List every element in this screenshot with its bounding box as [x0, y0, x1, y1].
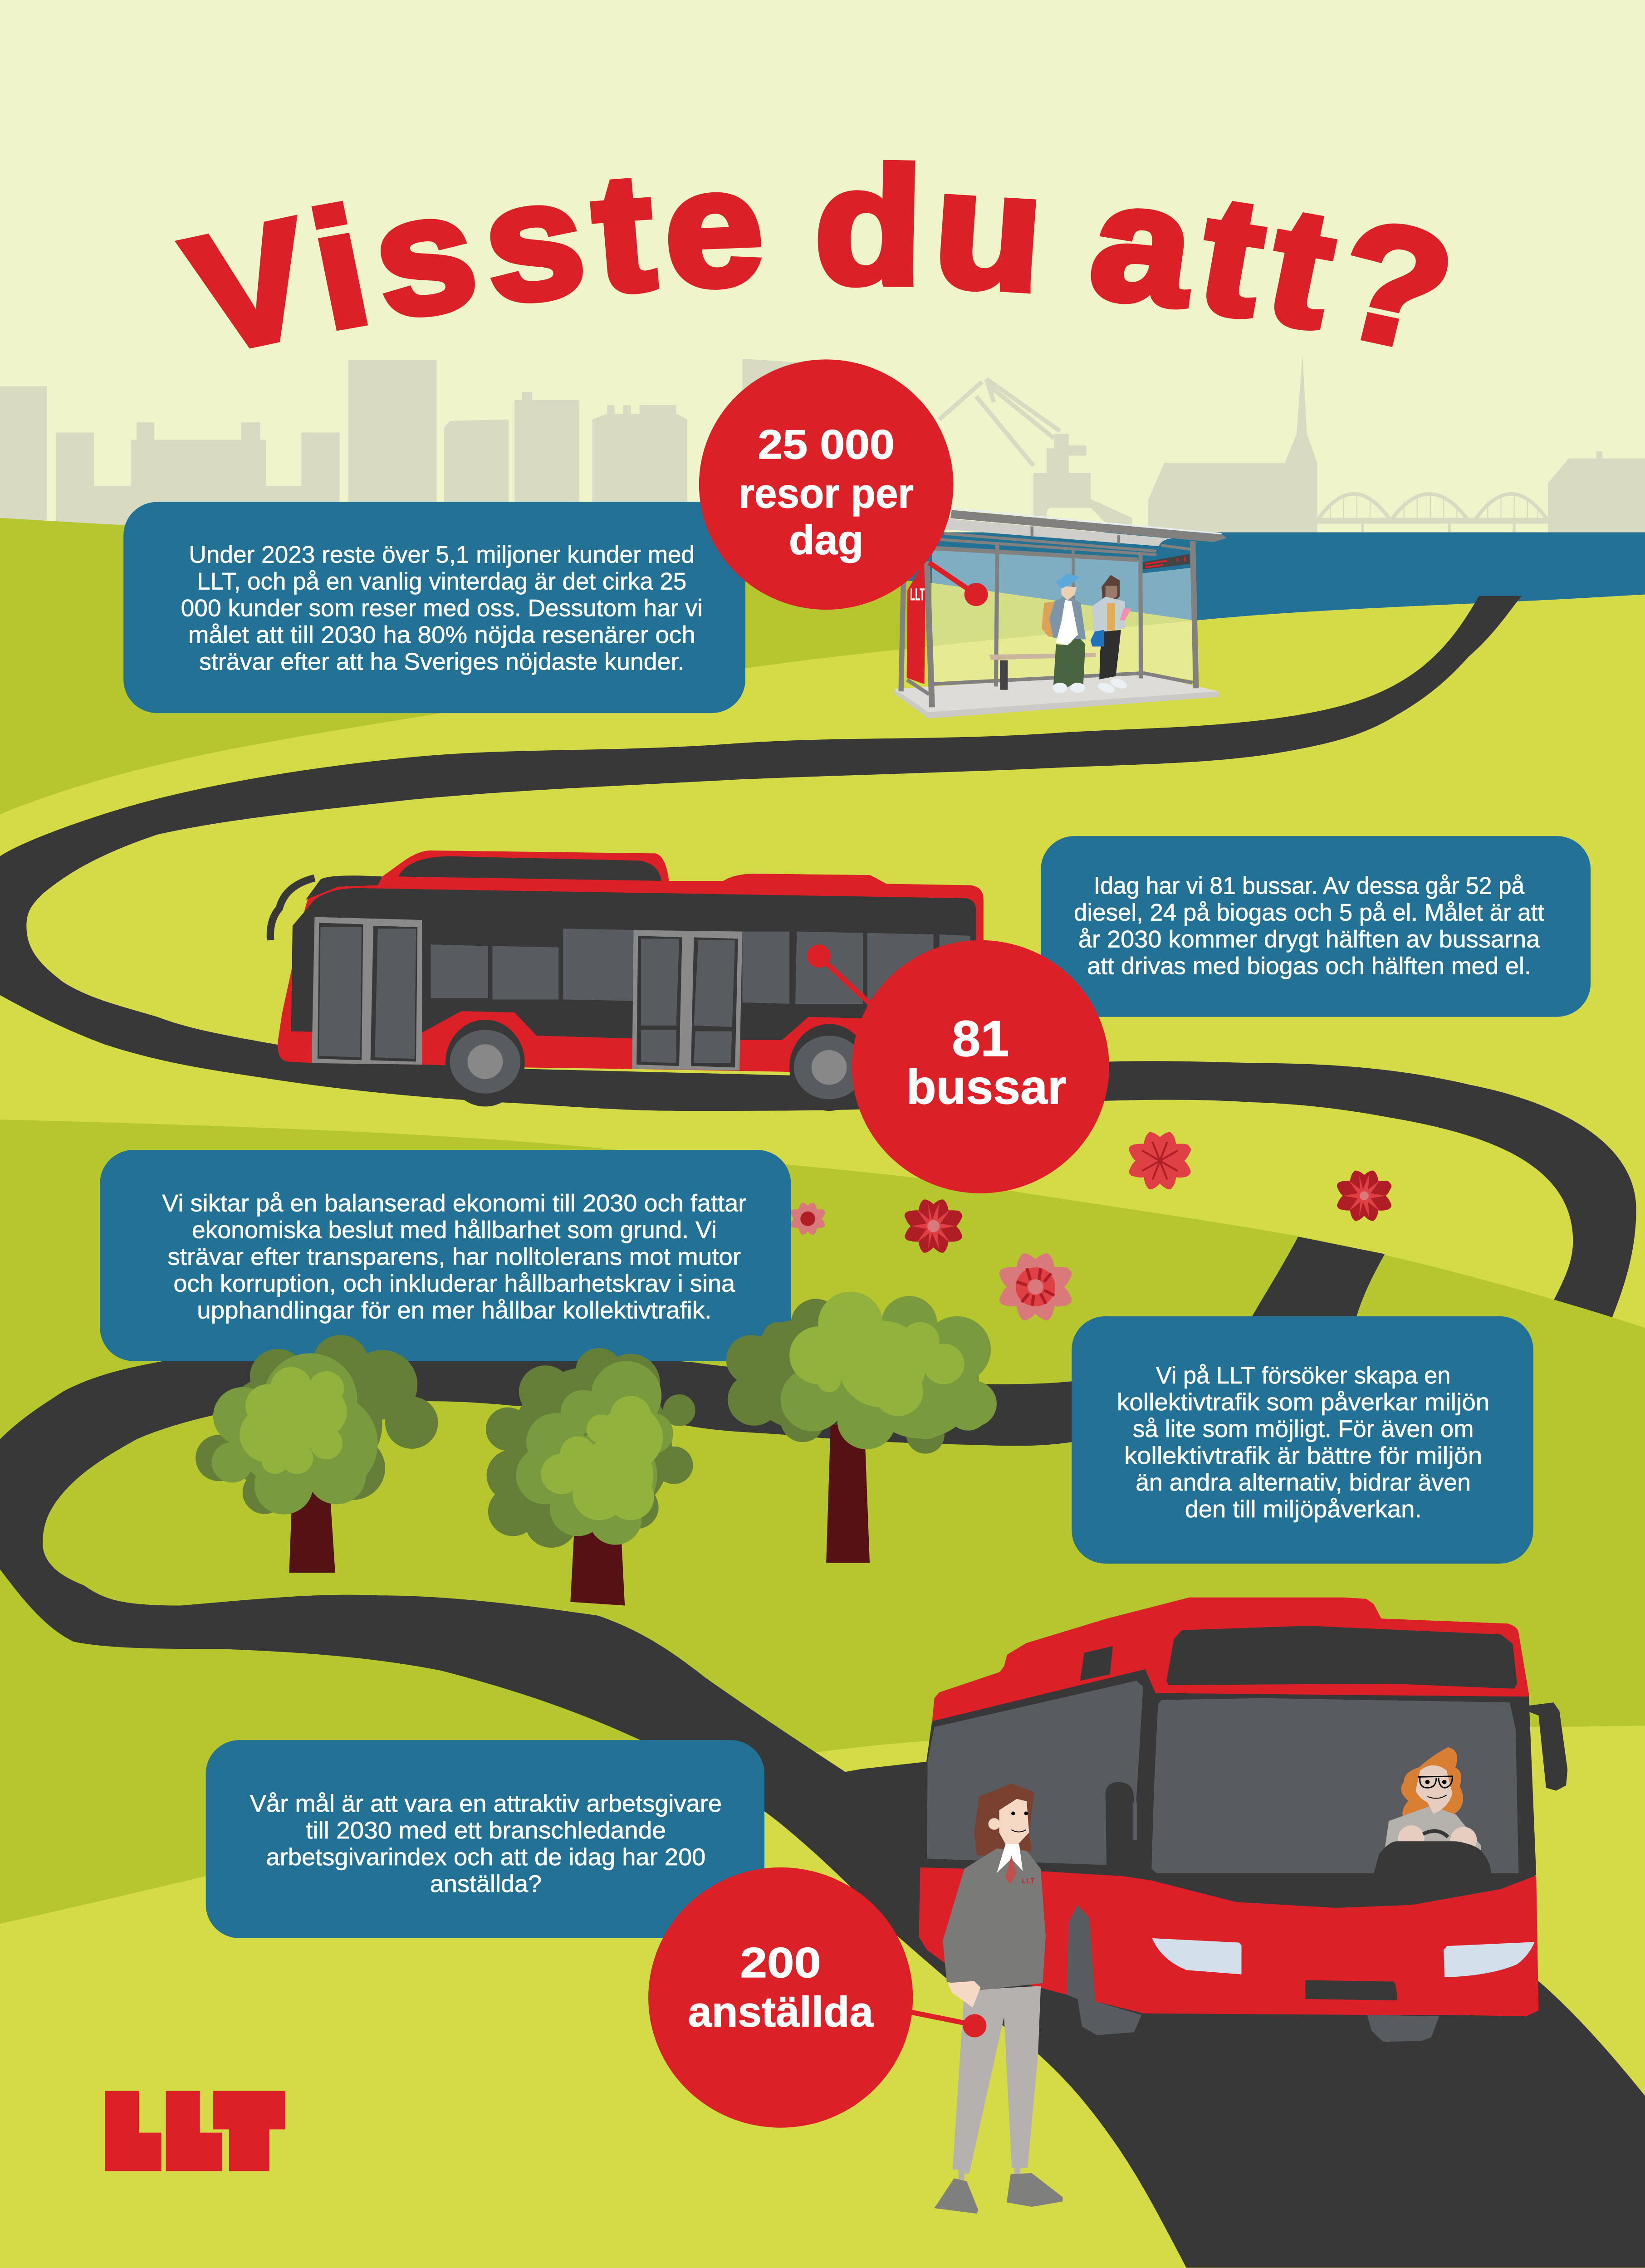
employee in uniform	[935, 1784, 1062, 2214]
dark body	[920, 1669, 1536, 1912]
info box: travellers: LLT, och på en vanlig vinterdag är det cirka 25	[197, 568, 686, 595]
flower 5	[999, 1253, 1072, 1320]
harbour crane	[940, 379, 1132, 538]
title: Visste du att?	[171, 132, 1479, 388]
info box: fleet: Idag har vi 81 bussar. Av dessa går 52 på	[1094, 873, 1525, 899]
flowers	[790, 1132, 1391, 1320]
bus driver	[1385, 1747, 1481, 1859]
mirror	[270, 878, 314, 940]
advertising panel	[907, 560, 925, 684]
info box: fleet	[1041, 836, 1591, 1017]
callout circle: 81 bussar: bussar	[906, 1060, 1067, 1114]
callout: 81 bussar pointer	[807, 944, 870, 1004]
bench	[989, 653, 1096, 690]
info box: economy: strävar efter transparens, har nolltolerans mot mutor	[167, 1244, 741, 1270]
info box: employer: till 2030 med ett branschledande	[306, 1817, 666, 1844]
collar and tie	[997, 1844, 1023, 1873]
glass back wall	[931, 550, 1142, 685]
number plate	[1305, 1980, 1397, 2000]
hand	[948, 1981, 980, 2008]
light green hill middle	[0, 595, 1645, 1447]
info box: travellers: strävar efter att ha Sveriges nöjdaste kunder.	[199, 649, 684, 675]
passenger: man with cap	[1042, 574, 1086, 693]
flower 4	[790, 1202, 825, 1235]
passenger: woman with phone	[1091, 575, 1131, 695]
bus shelter with two passengers: LLT	[910, 585, 925, 604]
middle door	[632, 930, 742, 1070]
rear wheel arch and wheel	[446, 1020, 525, 1106]
wheels	[1067, 1905, 1141, 2035]
LLT logo: L	[114, 2091, 151, 2172]
callout: 25 000 pointer	[929, 562, 988, 606]
side windows	[431, 929, 970, 1020]
info box: environment: än andra alternativ, bidrar även	[1136, 1469, 1471, 1496]
LLT logo: L	[175, 2091, 211, 2172]
callout circle: 25 000 resor per dag	[699, 359, 953, 610]
callout circle: 200 anställda: 200	[740, 1939, 821, 1987]
info box: economy	[100, 1150, 791, 1361]
front wheel arch and wheel	[789, 1024, 869, 1111]
roof	[950, 510, 1226, 542]
info box: environment: kollektivtrafik är bättre för miljön	[1124, 1442, 1482, 1469]
info box: economy: upphandlingar för en mer hållbar kollektivtrafik.	[197, 1297, 711, 1324]
info box: employer: arbetsgivarindex och att de idag har 200	[266, 1844, 705, 1871]
callout circle: 81 bussar	[852, 940, 1109, 1193]
road: lower winding section	[0, 1237, 1645, 2268]
callout circle: 200 anställda: anställda	[688, 1988, 874, 2036]
left headlight	[1152, 1938, 1242, 1975]
lower red body	[919, 1867, 1538, 2016]
info box: employer: anställda?	[430, 1871, 542, 1897]
LLT logo: T	[227, 2091, 271, 2171]
windshield	[1151, 1698, 1518, 1873]
callout circle: 25 000 resor per dag: dag	[789, 517, 863, 563]
info box: employer	[206, 1740, 764, 1938]
river	[823, 532, 1645, 621]
info box: travellers	[123, 502, 745, 713]
shoes	[935, 2178, 978, 2214]
light green hill bottom	[0, 1725, 1645, 2268]
info box: environment: den till miljöpåverkan.	[1185, 1496, 1421, 1523]
tree 1	[196, 1335, 438, 1573]
info box: employer: Vår mål är att vara en attraktiv arbetsgivare	[250, 1790, 722, 1817]
info box: environment: Vi på LLT försöker skapa en	[1156, 1362, 1450, 1389]
info box: environment: kollektivtrafik som påverkar miljön	[1117, 1389, 1489, 1416]
callout circle: 25 000 resor per dag: resor per	[739, 471, 914, 517]
right mirror	[1526, 1702, 1567, 1791]
road: upper winding section	[0, 596, 1636, 1324]
info box: travellers: Under 2023 reste över 5,1 miljoner kunder med	[189, 542, 695, 568]
info box: environment: så lite som möjligt. För även om	[1133, 1416, 1474, 1442]
dark green hill lower	[0, 1119, 1645, 2268]
roof	[932, 1598, 1529, 1750]
badge: LLT	[1022, 1877, 1035, 1885]
front view bus	[919, 1598, 1567, 2042]
tree 2	[486, 1348, 695, 1606]
wheel arch	[1067, 1905, 1095, 2002]
info box: environment	[1072, 1316, 1533, 1564]
info box: travellers: målet att till 2030 ha 80% nöjda resenärer och	[188, 622, 695, 648]
flower 2	[1337, 1171, 1391, 1221]
city skyline silhouette	[0, 354, 1645, 538]
info box: fleet: år 2030 kommer drygt hälften av bussarna	[1078, 926, 1540, 953]
right headlight	[1444, 1942, 1535, 1977]
small side window	[1080, 1646, 1113, 1681]
sweater	[943, 1848, 1046, 1990]
side view bus	[270, 850, 984, 1111]
callout circle: 81 bussar: 81	[952, 1010, 1009, 1067]
flower 3	[905, 1199, 962, 1253]
steering hump	[1374, 1841, 1491, 1873]
bridge	[1317, 494, 1548, 538]
callout: 200 anställda pointer	[910, 2012, 986, 2037]
bus body	[278, 850, 984, 1078]
hair	[974, 1784, 1034, 1857]
tree 3	[726, 1292, 997, 1563]
face	[999, 1799, 1029, 1851]
cathedral	[1148, 354, 1317, 538]
shelter frame	[901, 541, 1196, 694]
bus shelter with two passengers	[894, 508, 1226, 719]
callout circle: 25 000 resor per dag: 25 000	[758, 422, 895, 468]
flower 1	[1129, 1132, 1191, 1189]
info box: economy: Vi siktar på en balanserad ekonomi till 2030 och fattar	[162, 1190, 746, 1217]
info box: economy: ekonomiska beslut med hållbarhet som grund. Vi	[192, 1217, 717, 1243]
LLT logo	[114, 2091, 271, 2172]
shelter floor	[894, 675, 1219, 719]
front door	[312, 917, 422, 1065]
glass side wall	[1142, 568, 1193, 680]
info box: economy: och korruption, och inkluderar hållbarhetskrav i sina	[173, 1271, 735, 1297]
display board	[1143, 554, 1190, 570]
side window	[927, 1681, 1143, 1866]
trousers and ankles	[953, 1986, 1041, 2180]
info box: fleet: diesel, 24 på biogas och 5 på el. Målet är att	[1074, 899, 1544, 926]
dark green hill top	[0, 518, 1195, 868]
info box: fleet: att drivas med biogas och hälften med el.	[1087, 953, 1531, 980]
callout circle: 200 anställda	[648, 1867, 913, 2128]
info box: travellers: 000 kunder som reser med oss. Dessutom har vi	[181, 595, 703, 621]
destination sign	[1166, 1626, 1517, 1689]
